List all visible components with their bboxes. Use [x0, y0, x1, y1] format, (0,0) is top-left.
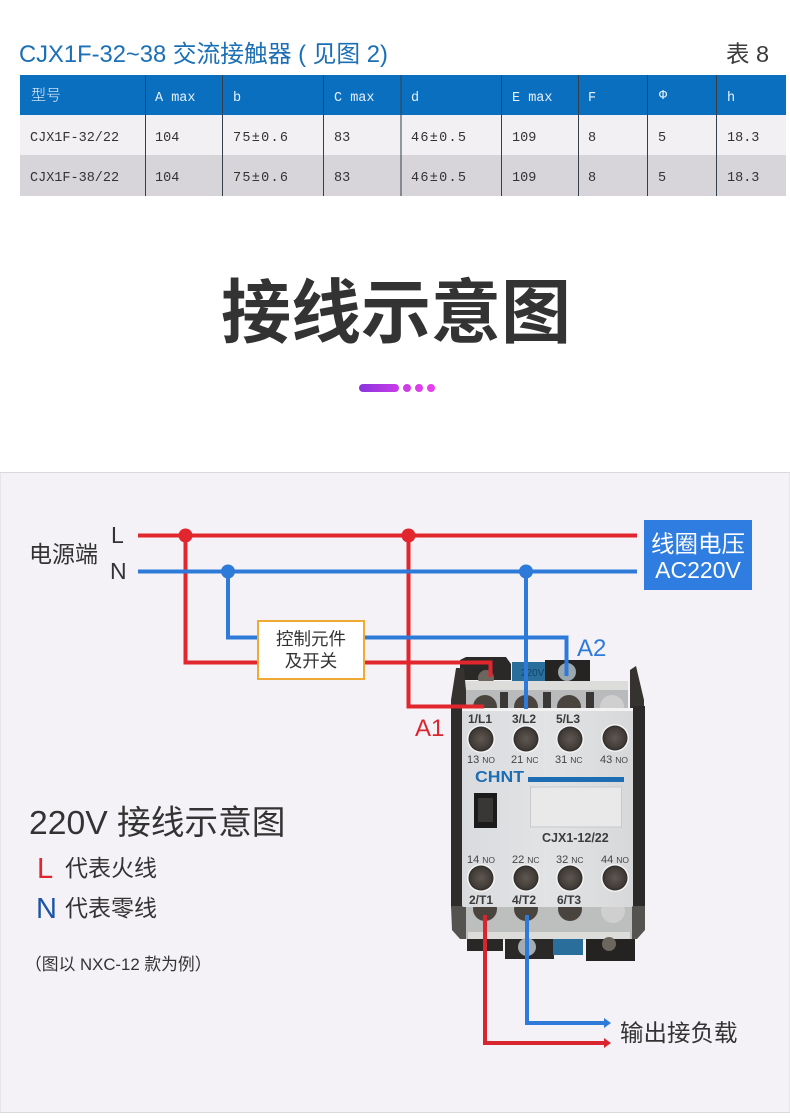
upper terminal labels: [468, 712, 580, 726]
table row CJX1F-32/22: 5: [658, 131, 666, 146]
coil voltage box: 线圈电压: [651, 531, 745, 557]
table header row: A max: [155, 91, 196, 106]
lower terminal labels: 6/T3: [557, 893, 581, 907]
table header row: h: [727, 91, 735, 106]
table row CJX1F-38/22: 75±0.6: [233, 171, 288, 186]
table header row: [20, 75, 786, 115]
table row CJX1F-38/22: 109: [512, 171, 536, 186]
table row CJX1F-32/22: CJX1F-32/22: [30, 131, 119, 146]
legend: L live: 代表火线: [65, 855, 157, 881]
lower auxiliary labels: 14 NO: [467, 854, 495, 866]
neutral wire network: [138, 564, 637, 709]
front plate: [462, 708, 633, 907]
top dark blocks and coil: 220V: [521, 668, 545, 679]
label window: [530, 787, 622, 827]
label: N: N: [110, 558, 127, 584]
table header row: C max: [334, 91, 375, 106]
table row CJX1F-32/22: [20, 115, 786, 155]
upper screws: [467, 724, 629, 753]
upper auxiliary labels: 21 NC: [511, 754, 539, 766]
table row CJX1F-38/22: 18.3: [727, 171, 759, 186]
panel: wiring diagram: [0, 472, 790, 1112]
example note: （图以 NXC-12 款为例）: [25, 955, 211, 974]
control element box: 及开关: [285, 651, 337, 671]
upper terminal band: [466, 681, 628, 719]
table row CJX1F-32/22: 8: [588, 131, 596, 146]
upper terminal labels: 5/L3: [556, 712, 580, 726]
table header row: 型号: [31, 84, 61, 105]
legend: L live: [37, 853, 157, 885]
table row CJX1F-32/22: 75±0.6: [233, 131, 288, 146]
control element box: 控制元件: [276, 629, 346, 649]
brand logo: CHNT: [475, 769, 524, 786]
bottom dark blocks: [467, 937, 635, 961]
label: A2: A2: [577, 635, 606, 662]
legend: N neutral: N: [36, 893, 57, 925]
upper auxiliary labels: 43 NO: [600, 754, 628, 766]
label: L: L: [111, 522, 124, 548]
dark side walls: [451, 706, 645, 939]
lower terminal labels: 4/T2: [512, 893, 536, 907]
heading accent: pill and dots: [359, 384, 435, 392]
live wire network: [138, 528, 637, 706]
output wire: blue with arrow: [527, 915, 611, 1028]
upper auxiliary labels: [467, 754, 628, 766]
upper terminal labels: 3/L2: [512, 712, 536, 726]
lower terminal labels: 2/T1: [469, 893, 493, 907]
table header row: E max: [512, 91, 553, 106]
top dark blocks and coil: [451, 657, 644, 708]
table row CJX1F-38/22: CJX1F-38/22: [30, 171, 119, 186]
lower auxiliary labels: 44 NO: [601, 854, 629, 866]
upper terminal labels: 1/L1: [468, 712, 492, 726]
table title: CJX1F-32~38 交流接触器 ( 见图 2): [19, 41, 388, 68]
table row CJX1F-32/22: 104: [155, 131, 179, 146]
diagram subtitle: 220V 接线示意图: [29, 804, 285, 842]
lower auxiliary labels: 22 NC: [512, 854, 540, 866]
control element box: [258, 621, 364, 679]
contactor device: [451, 657, 645, 961]
table header row: F: [588, 91, 596, 106]
lower terminal labels: [469, 893, 581, 907]
label: A1: A1: [415, 715, 444, 742]
model label: CJX1-12/22: [542, 831, 609, 845]
table header row: b: [233, 91, 241, 106]
table row CJX1F-38/22: 104: [155, 171, 179, 186]
label: output load: 输出接负载: [620, 1020, 738, 1046]
table row CJX1F-38/22: [20, 155, 786, 196]
upper auxiliary labels: 13 NO: [467, 754, 495, 766]
black switch: [474, 793, 497, 828]
table row CJX1F-38/22: 46±0.5: [411, 171, 466, 186]
coil voltage box: [644, 520, 752, 590]
table row CJX1F-32/22: 46±0.5: [411, 131, 466, 146]
legend: N neutral: [36, 893, 157, 925]
section heading: 接线示意图: [221, 274, 571, 352]
label: power source: 电源端: [29, 541, 98, 567]
lower terminal band: [466, 897, 632, 940]
coil voltage box: AC220V: [655, 557, 741, 583]
lower auxiliary labels: 32 NC: [556, 854, 584, 866]
brand logo: [475, 769, 624, 786]
table row CJX1F-38/22: 5: [658, 171, 666, 186]
upper auxiliary labels: 31 NC: [555, 754, 583, 766]
table row CJX1F-38/22: 83: [334, 171, 350, 186]
output wire: red with arrow: [485, 915, 611, 1048]
lower screws: [467, 864, 629, 892]
lower auxiliary labels: [467, 854, 629, 866]
legend: L live: L: [37, 853, 53, 885]
table header row: d: [411, 91, 419, 106]
table row CJX1F-32/22: 109: [512, 131, 536, 146]
table row CJX1F-32/22: 18.3: [727, 131, 759, 146]
table row CJX1F-32/22: 83: [334, 131, 350, 146]
table header row: Φ: [659, 89, 668, 104]
specifications table: [20, 75, 786, 196]
table number: 表 8: [726, 41, 769, 67]
table row CJX1F-38/22: 8: [588, 171, 596, 186]
legend: N neutral: 代表零线: [65, 895, 157, 921]
